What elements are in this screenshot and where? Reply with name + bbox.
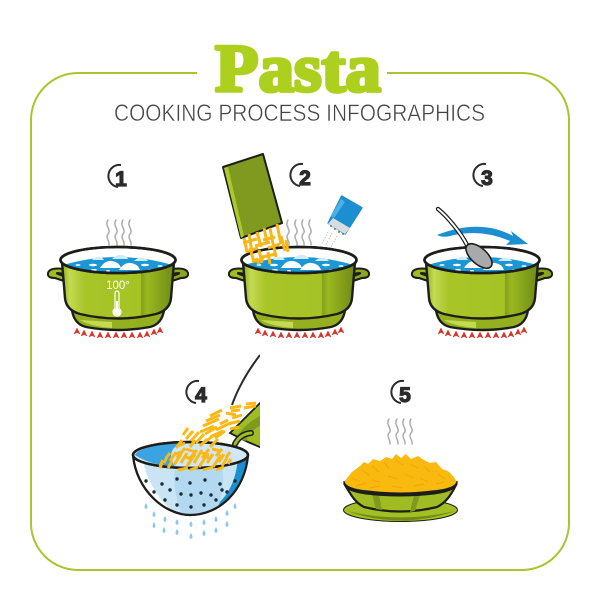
title: Pasta xyxy=(215,30,381,106)
icon: salt shaker xyxy=(321,197,361,248)
pouring pasta xyxy=(160,403,256,470)
colander xyxy=(133,442,250,520)
water drops xyxy=(144,503,236,539)
icon: spoon xyxy=(438,209,496,273)
subtitle: COOKING PROCESS INFOGRAPHICS xyxy=(114,100,485,127)
number 2 xyxy=(290,164,311,190)
number 2: 2 xyxy=(299,167,311,190)
step 3 xyxy=(412,164,552,338)
step 1 xyxy=(48,165,188,338)
icon: thermometer xyxy=(113,291,121,316)
number 1: 1 xyxy=(115,168,127,191)
boiling pot xyxy=(229,247,369,338)
bowl highlights xyxy=(372,494,420,512)
colander holes xyxy=(144,477,237,509)
step 4 xyxy=(133,355,262,539)
number 1 xyxy=(108,165,127,191)
number 5 xyxy=(391,381,411,407)
step 5 xyxy=(344,381,458,522)
number 4: 4 xyxy=(195,384,207,407)
bowl rim xyxy=(344,481,457,496)
tilted pot xyxy=(230,355,262,448)
plate xyxy=(344,498,458,522)
boiling pot xyxy=(48,247,188,338)
step 2 xyxy=(223,154,369,338)
steam xyxy=(107,220,131,245)
number 5: 5 xyxy=(399,384,411,407)
pasta heap xyxy=(344,454,457,493)
number 3: 3 xyxy=(481,167,493,190)
number 3 xyxy=(473,164,493,190)
arrow: stirring xyxy=(437,227,528,245)
steam xyxy=(287,220,311,245)
panel border xyxy=(31,73,569,570)
steam xyxy=(388,419,412,444)
temperature label: 100° xyxy=(106,280,130,292)
bowl xyxy=(345,485,456,512)
falling pasta xyxy=(243,224,288,264)
boiling pot xyxy=(412,247,552,338)
number 4 xyxy=(186,381,207,407)
pasta box xyxy=(223,154,282,238)
